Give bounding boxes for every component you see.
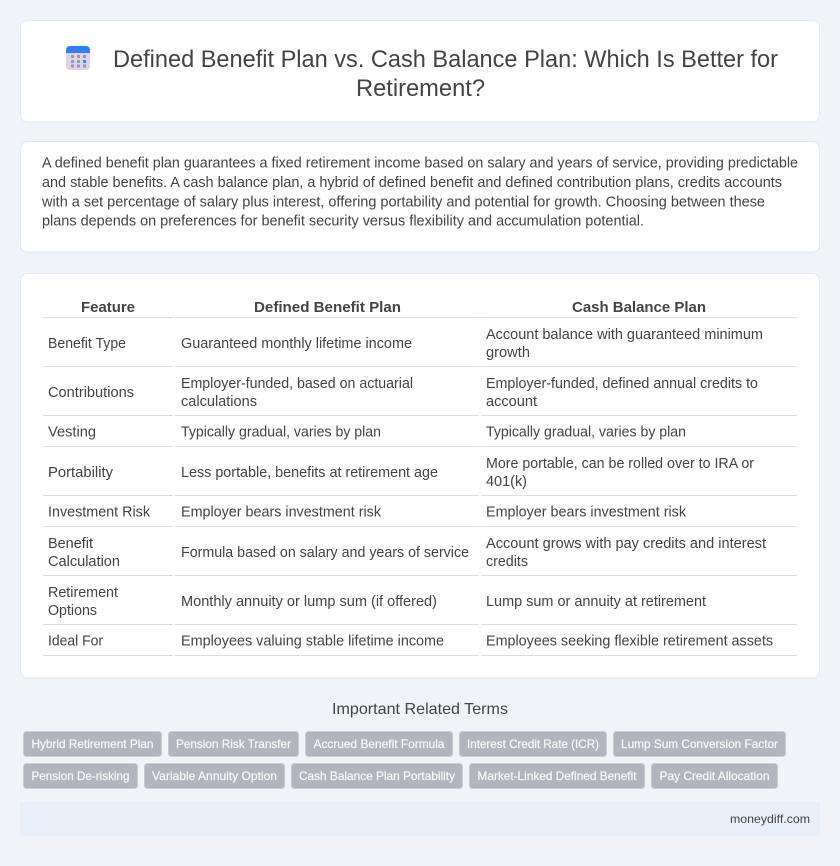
row: Vesting: Typically gradual, varies by plan — [486, 424, 686, 440]
row: Vesting: Vesting — [48, 424, 96, 440]
row: Portability: More portable, can be rolled over to IRA or — [486, 456, 754, 472]
table header row: Defined Benefit Plan — [254, 299, 401, 316]
intro text block: with a set percentage of salary plus interest, offering portability and potential for growth. Choosing between these — [41, 194, 765, 210]
tag: Pay Credit Allocation — [652, 764, 778, 788]
table header row — [43, 299, 797, 318]
row: Benefit Calculation: Benefit — [48, 536, 93, 552]
tag: Cash Balance Plan Portability — [292, 764, 462, 788]
row: Contributions: account — [486, 394, 537, 410]
row: Contributions: Contributions — [48, 385, 134, 401]
tag: Hybrid Retirement Plan — [24, 732, 162, 756]
tag: Lump Sum Conversion Factor — [614, 732, 786, 756]
icon: calendar — [66, 46, 90, 70]
tag: Variable Annuity Option — [144, 764, 284, 788]
row: Benefit Calculation: Account grows with pay credits and interest — [486, 536, 766, 552]
row: Vesting — [43, 424, 797, 447]
footer bar — [20, 802, 820, 836]
panel: introduction — [20, 142, 820, 252]
tag: Pension De-risking — [24, 764, 138, 788]
intro text block: plans depends on preferences for benefit security versus flexibility and accumulation potential. — [42, 214, 644, 230]
related term tags — [24, 732, 786, 788]
header panel — [20, 20, 820, 122]
tag: Pay Credit Allocation: Pay Credit Allocation — [660, 769, 770, 783]
tag: Market-Linked Defined Benefit: Market-Linked Defined Benefit — [478, 769, 637, 783]
intro text block: A defined benefit plan guarantees a fixed retirement income based on salary and years of service, providing predictable — [42, 156, 798, 172]
row: Benefit Type: Account balance with guaranteed minimum — [486, 327, 763, 343]
footer source text: moneydiff.com — [730, 812, 810, 826]
row: Benefit Type: growth — [486, 345, 530, 361]
row: Contributions: Employer-funded, defined annual credits to — [486, 376, 758, 392]
row: Benefit Type: Guaranteed monthly lifetime income — [181, 336, 412, 352]
row: Ideal For: Employees seeking flexible retirement assets — [486, 634, 773, 650]
tag: Pension Risk Transfer: Pension Risk Transfer — [176, 737, 291, 751]
intro text block — [41, 156, 798, 230]
row: Benefit Type: Benefit Type — [48, 336, 126, 352]
row: Investment Risk — [43, 504, 797, 527]
intro text block: and stable benefits. A cash balance plan, a hybrid of defined benefit and defined contribution plans, credits accounts — [42, 175, 782, 191]
row: Vesting: Typically gradual, varies by plan — [181, 424, 381, 440]
row: Portability: 401(k) — [486, 474, 527, 490]
tag: Accrued Benefit Formula: Accrued Benefit Formula — [314, 737, 445, 751]
tag: Market-Linked Defined Benefit — [470, 764, 644, 788]
row: Retirement Options: Options — [48, 603, 97, 619]
tag: Interest Credit Rate (ICR) — [460, 732, 606, 756]
row: Retirement Options: Retirement — [48, 585, 118, 601]
row: Investment Risk: Employer bears investment risk — [181, 504, 382, 520]
table header row: Cash Balance Plan — [572, 299, 706, 316]
row: Contributions: calculations — [181, 394, 257, 410]
row: Ideal For: Ideal For — [48, 634, 103, 650]
title: Defined Benefit Plan vs. Cash Balance Plan: Which Is Better for — [113, 46, 778, 73]
row: Portability: Portability — [48, 465, 114, 481]
row: Benefit Calculation: Calculation — [48, 554, 120, 570]
row: Benefit Calculation: credits — [486, 554, 528, 570]
row: Retirement Options: Lump sum or annuity at retirement — [486, 594, 706, 610]
tag: Pension De-risking: Pension De-risking — [32, 769, 130, 783]
heading: Important Related Terms: Important Related Terms — [332, 701, 508, 718]
tag: Interest Credit Rate (ICR): Interest Credit Rate (ICR) — [467, 737, 599, 751]
tag: Hybrid Retirement Plan: Hybrid Retirement Plan — [32, 737, 154, 751]
row: Portability — [43, 456, 797, 496]
row: Contributions: Employer-funded, based on actuarial — [181, 376, 413, 392]
row: Portability: Less portable, benefits at retirement age — [181, 465, 438, 481]
row: Investment Risk: Investment Risk — [48, 504, 151, 520]
row: Benefit Calculation: Formula based on salary and years of service — [181, 545, 469, 561]
tag: Variable Annuity Option: Variable Annuity Option — [152, 769, 277, 783]
tag: Accrued Benefit Formula — [306, 732, 452, 756]
row: Benefit Calculation — [43, 536, 797, 576]
tag: Pension Risk Transfer — [168, 732, 298, 756]
row: Ideal For: Employees valuing stable lifetime income — [181, 634, 444, 650]
row: Contributions — [43, 376, 797, 416]
tag: Cash Balance Plan Portability: Cash Balance Plan Portability — [299, 769, 455, 783]
row: Retirement Options: Monthly annuity or lump sum (if offered) — [181, 594, 437, 610]
table header row: Feature — [81, 299, 135, 316]
row: Ideal For — [43, 634, 797, 656]
title: Retirement? — [356, 75, 485, 102]
panel: comparison table — [20, 274, 820, 678]
row: Investment Risk: Employer bears investment risk — [486, 504, 687, 520]
row: Retirement Options — [43, 585, 797, 625]
tag: Lump Sum Conversion Factor: Lump Sum Conversion Factor — [621, 737, 778, 751]
row: Benefit Type — [43, 327, 797, 367]
title — [113, 46, 778, 102]
